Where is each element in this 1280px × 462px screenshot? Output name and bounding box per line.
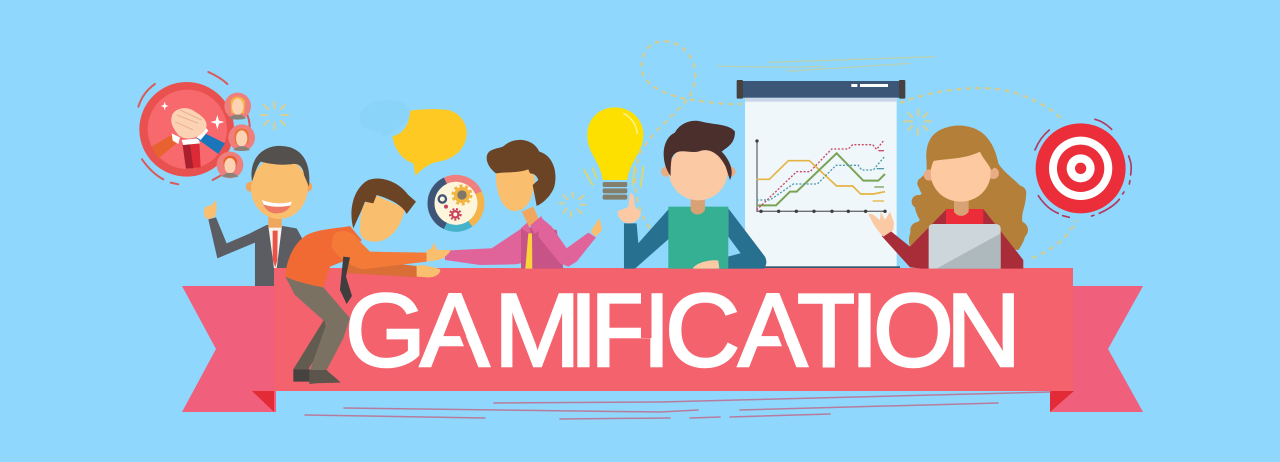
axis points — [755, 139, 887, 213]
ears — [661, 167, 736, 177]
roller caps — [737, 80, 905, 99]
title: GAMIFICATION — [345, 273, 1021, 389]
main ribbon — [274, 268, 1073, 391]
hand — [427, 243, 451, 262]
flip chart — [737, 80, 905, 269]
shoes — [293, 369, 341, 384]
teal series — [757, 156, 885, 200]
roller — [740, 81, 903, 98]
board top shadow — [745, 98, 897, 102]
neck and face — [360, 195, 405, 242]
back leg — [293, 318, 327, 369]
pink sleeve left — [445, 228, 535, 265]
avatar one — [224, 93, 251, 120]
banner — [182, 268, 1143, 412]
ears — [246, 182, 312, 192]
high five hands — [152, 108, 225, 169]
neck — [522, 207, 538, 227]
man in green — [617, 121, 766, 269]
bulb base — [603, 182, 627, 200]
line chart — [755, 139, 887, 213]
smile — [262, 200, 292, 213]
laptop — [929, 224, 1001, 269]
hair — [251, 146, 309, 187]
shirt and tie — [268, 226, 282, 268]
target rings — [1036, 123, 1126, 213]
sparkle burst near woman — [904, 109, 931, 135]
hair — [664, 121, 735, 180]
yellow tie — [525, 233, 532, 269]
sweater — [882, 209, 1023, 269]
dashed flight path — [635, 41, 1077, 258]
man with suit — [204, 146, 312, 287]
panel: teamwork badge — [138, 72, 467, 184]
sparkle burst — [261, 102, 288, 129]
upper arm — [332, 231, 427, 269]
sparkle burst — [559, 193, 586, 217]
badge circles — [139, 82, 234, 177]
sleeves — [624, 208, 766, 269]
left hand — [426, 243, 451, 261]
right ribbon tail — [1050, 286, 1143, 412]
target motion arcs — [1035, 119, 1131, 217]
light bulb — [584, 107, 643, 200]
hair — [487, 140, 555, 206]
collar — [521, 216, 543, 234]
avatar two — [228, 124, 255, 151]
raised finger hand — [617, 193, 641, 223]
series labels — [873, 151, 884, 201]
left fold — [252, 391, 274, 412]
neck — [954, 200, 969, 216]
faint speech bubble — [359, 100, 410, 138]
shirt — [285, 226, 362, 287]
red inner top — [946, 209, 983, 227]
roller marks — [851, 84, 888, 87]
face — [931, 145, 991, 202]
board sheet — [745, 98, 897, 267]
right arm — [538, 217, 596, 267]
left ribbon tail — [182, 286, 276, 412]
target icon — [1035, 119, 1131, 217]
board bottom edge — [745, 266, 900, 269]
tie — [340, 257, 352, 304]
neck — [268, 215, 282, 228]
gear icon — [431, 178, 481, 228]
neck — [691, 198, 705, 214]
green series — [757, 153, 885, 205]
ground sketch lines — [305, 392, 1050, 419]
back hair — [909, 126, 1028, 250]
speech bubble — [393, 109, 467, 176]
torso — [521, 227, 563, 269]
hair — [351, 179, 416, 228]
front hair — [926, 126, 998, 170]
avatars — [217, 93, 255, 178]
lower arm — [343, 258, 440, 277]
resting hand — [693, 260, 719, 269]
badge motion arcs — [138, 72, 250, 184]
right hand — [591, 218, 602, 237]
right fold — [1050, 391, 1074, 412]
raised hand — [204, 200, 217, 219]
suit — [208, 217, 307, 287]
title letter trims — [458, 288, 858, 349]
face — [251, 158, 308, 219]
green shirt — [668, 207, 728, 269]
man in pink, gear icon and bulb — [426, 107, 643, 269]
yellow series — [757, 161, 885, 194]
highlight — [623, 113, 637, 134]
bulb glass — [587, 107, 643, 180]
red series — [757, 141, 883, 210]
sparkles — [161, 102, 224, 129]
trousers — [285, 276, 350, 370]
glow strokes — [584, 167, 643, 187]
crouching man in orange — [285, 179, 451, 384]
face — [496, 168, 535, 211]
face — [669, 143, 728, 200]
avatar three — [217, 152, 243, 178]
ears — [924, 168, 999, 181]
woman with laptop — [868, 126, 1028, 269]
axes — [757, 141, 887, 211]
waving hand — [868, 212, 894, 237]
sketch lines above the board — [717, 57, 935, 71]
